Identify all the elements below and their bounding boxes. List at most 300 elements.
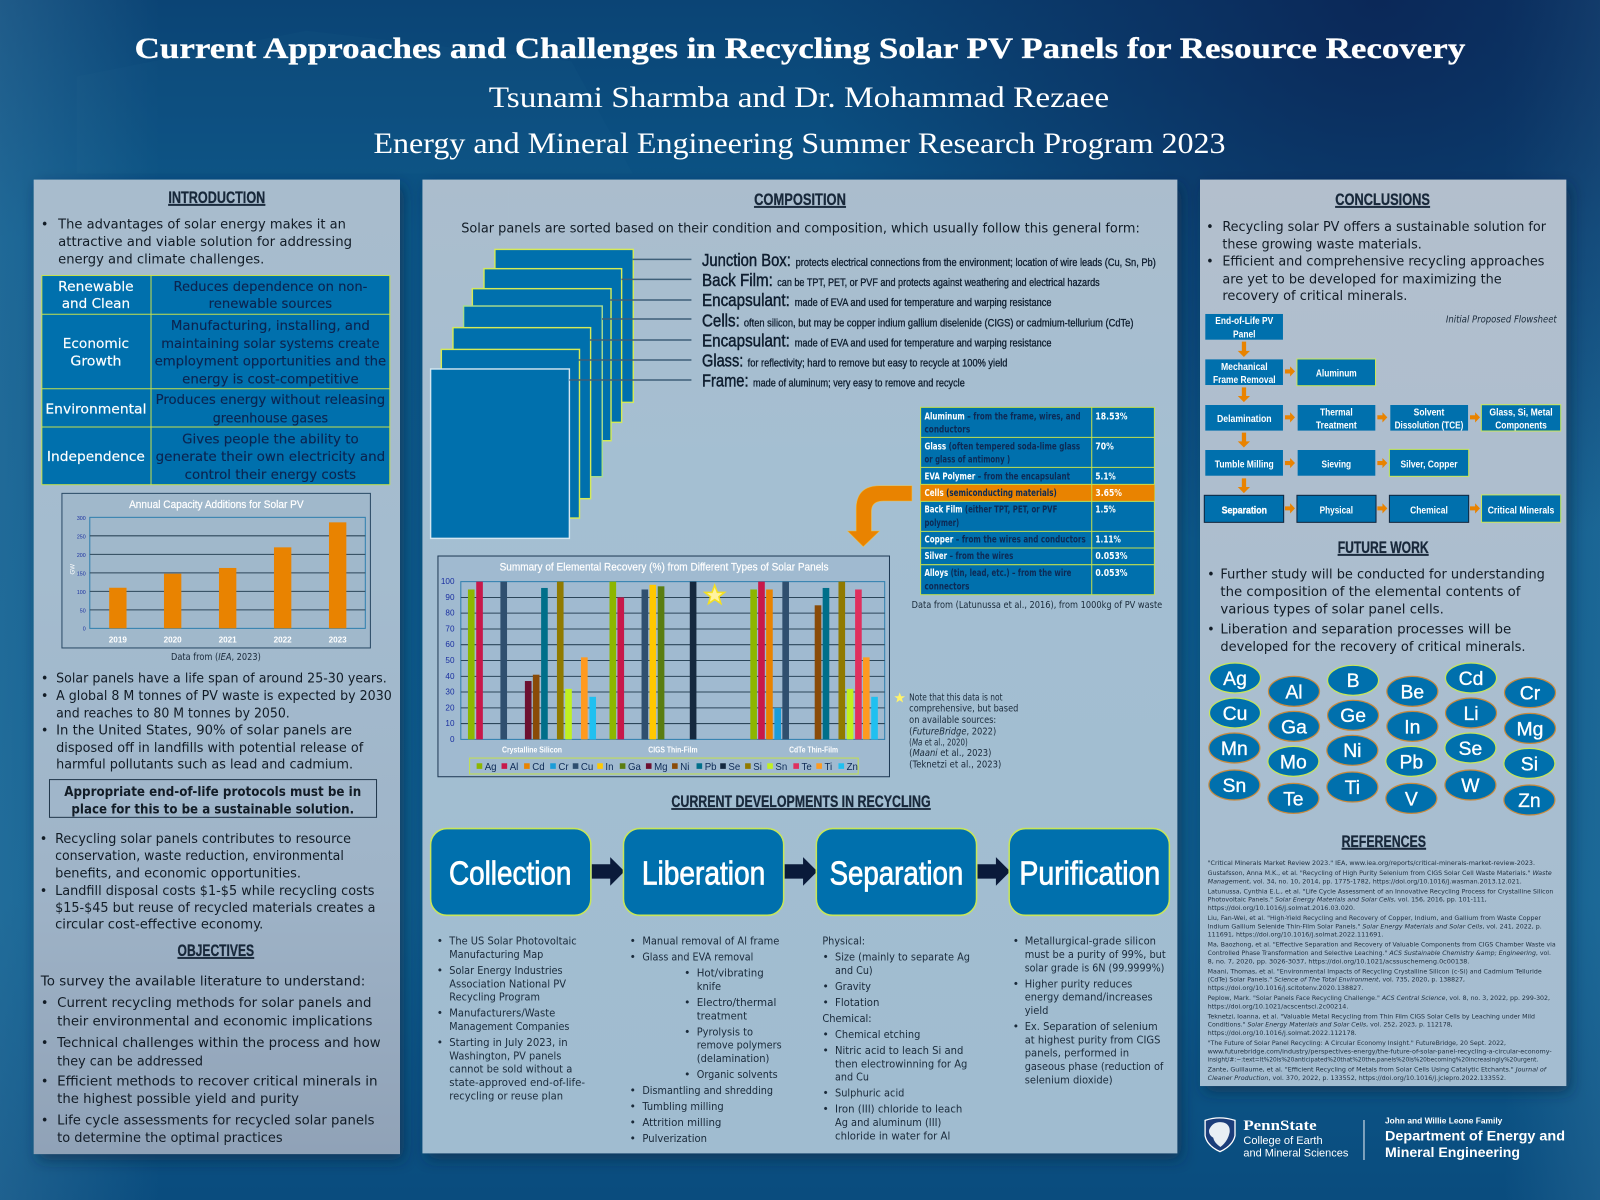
text block: collection details: • <box>437 1036 443 1049</box>
bar chart: elemental recovery: 50 <box>445 656 455 665</box>
text block: waste statistics: disposed off in landfills with potential release of <box>56 741 364 756</box>
arrow: separation to purification <box>978 857 1010 886</box>
text block: references: Latunussa, Cynthia E.L., et al. "Life Cycle Assessment of an Innovative Recycling Process for Crystalline Silicon <box>1208 887 1553 895</box>
text block: separation details: Flotation <box>835 996 879 1009</box>
text block: separation details: chloride in water for Al <box>835 1129 950 1142</box>
text block: recycling benefits <box>40 832 376 933</box>
text block: collection details: Washington, PV panels <box>449 1049 562 1062</box>
elements: critical mineral ovals: B <box>1347 670 1360 692</box>
table: PV panel material composition: Copper – from the wires and conductors <box>924 535 1086 546</box>
elements: critical mineral ovals: Ni <box>1343 740 1361 762</box>
caption: table source: Data from (Latunussa et al., 2016), from 1000kg of PV waste <box>912 600 1162 611</box>
text block: purification details: • <box>1013 977 1019 990</box>
text block: liberation details: • <box>630 1132 636 1145</box>
text block: future work: • <box>1207 568 1215 583</box>
bar chart: elemental recovery <box>438 556 889 777</box>
bar chart: annual capacity additions: 2019 <box>109 635 127 644</box>
table: PV panel material composition: conductors <box>924 425 971 436</box>
logo: Penn State College of Earth and Mineral Sciences: College of Earth <box>1243 1135 1323 1147</box>
table: PV panel material composition: connectors <box>924 581 970 592</box>
text block: collection details: • <box>437 964 443 977</box>
callout: end-of-life protocols: Appropriate end-of-life protocols must be in <box>64 785 361 800</box>
elements: critical mineral ovals <box>1209 663 1556 815</box>
note: data sources: (Ma et al., 2020) <box>909 738 968 749</box>
text block: objectives: Life cycle assessments for recycled solar panels <box>57 1113 375 1128</box>
stage: purification: Purification <box>1019 856 1160 893</box>
chart legend: In <box>605 762 614 773</box>
text block: separation details: Nitric acid to leach Si and <box>835 1044 963 1057</box>
text block: future work: various types of solar panel cells. <box>1220 602 1444 617</box>
table: benefits of solar energy: greenhouse gases <box>213 411 328 426</box>
text block: separation details: and Cu <box>835 1071 869 1084</box>
labels: panel layers: Glass: <box>702 351 743 371</box>
bar chart: elemental recovery: CIGS Thin-Film <box>648 746 698 755</box>
text block: purification details: • <box>1013 1020 1019 1033</box>
flowsheet: proposed recycling process: Glass, Si, Metal <box>1489 407 1553 418</box>
table: benefits of solar energy: control their energy costs <box>185 468 356 483</box>
text block: advantages: attractive and viable solution for addressing <box>58 235 352 250</box>
text block: recycling benefits: • <box>40 832 47 847</box>
bar chart: annual capacity additions: 0 <box>83 627 86 633</box>
text block: objectives: • <box>41 1113 48 1128</box>
chart legend: Se <box>728 762 740 773</box>
text block: objectives: • <box>41 996 48 1011</box>
bar chart: elemental recovery: 60 <box>445 640 455 649</box>
text block: future work: Liberation and separation processes will be <box>1220 623 1511 638</box>
labels: panel layers: made of EVA and used for temperature and warping resistance <box>795 338 1052 350</box>
heading: composition: COMPOSITION <box>754 191 846 209</box>
program name: Energy and Mineral Engineering Summer Research Program 2023 <box>373 128 1226 160</box>
text block: liberation details: treatment <box>697 1009 747 1022</box>
heading: conclusions: CONCLUSIONS <box>1335 191 1430 209</box>
text block: conclusions: recovery of critical minerals. <box>1222 289 1407 304</box>
text block: objectives: To survey the available literature to understand: <box>40 975 365 990</box>
labels: panel layers: Back Film: <box>702 270 773 290</box>
text block: waste statistics: • <box>41 672 48 687</box>
elements: critical mineral ovals: Ag <box>1223 668 1247 690</box>
elements: critical mineral ovals: Ga <box>1281 716 1307 738</box>
text block: recycling benefits: • <box>40 884 47 899</box>
stage: liberation: Liberation <box>642 856 765 893</box>
chart legend: Al <box>510 762 518 773</box>
text block: separation details: Iron (III) chloride to leach <box>835 1103 962 1116</box>
text block: liberation details <box>630 935 782 1145</box>
flowsheet: proposed recycling process: Delamination <box>1217 414 1272 425</box>
table: PV panel material composition: 0.053% <box>1095 551 1128 562</box>
text block: references: Teknetzi, Ioanna, et al. "Valuable Metal Recycling from Thin Film CIGS Solar Cells by Leaching under Mild <box>1207 1012 1535 1020</box>
text block: future work: Further study will be conducted for understanding <box>1220 568 1545 583</box>
text block: collection details: state-approved end-of-life- <box>449 1076 585 1089</box>
text block: objectives: to determine the optimal practices <box>57 1131 283 1146</box>
labels: panel layers: for reflectivity; hard to remove but easy to recycle at 100% yield <box>748 358 1008 370</box>
text block: purification details: Higher purity reduces <box>1025 977 1133 990</box>
text block: liberation details: Hot/vibrating <box>697 967 764 980</box>
table: PV panel material composition: 3.65% <box>1095 488 1122 499</box>
icon: star marker in chart <box>705 585 724 604</box>
chart legend: Pb <box>705 762 717 773</box>
text block: liberation details: Electro/thermal <box>697 996 776 1009</box>
authors: Tsunami Sharmba and Dr. Mohammad Rezaee <box>489 82 1109 114</box>
elements: critical mineral ovals: Be <box>1400 681 1424 703</box>
text block: liberation details: Pyrolysis to <box>697 1025 753 1038</box>
bar chart: annual capacity additions: GW <box>69 564 76 574</box>
text block: references: Indium Gallium Selenide Thin-Film Solar Panels." Solar Energy Materials and Solar Cells, vol. 241, 2022, p. <box>1208 922 1542 930</box>
table: PV panel material composition: 1.11% <box>1095 535 1121 546</box>
elements: critical mineral ovals: Mn <box>1221 738 1248 760</box>
text block: purification details: • <box>1013 935 1019 948</box>
labels: panel layers: often silicon, but may be copper indium gallium diselenide (CIGS) or cadmium-tellurium (CdTe) <box>744 318 1133 330</box>
text block: separation details: Size (mainly to separate Ag <box>835 951 970 964</box>
text block: recycling benefits: benefits, and economic opportunities. <box>55 867 301 882</box>
flowsheet: proposed recycling process: Dissolution (TCE) <box>1395 421 1463 432</box>
bar chart: elemental recovery: 80 <box>445 609 455 618</box>
labels: panel layers: can be TPT, PET, or PVF and protects against weathering and electrical hazards <box>777 277 1100 289</box>
text block: waste statistics <box>41 672 392 772</box>
table: benefits of solar energy: Reduces dependence on non- <box>173 280 367 295</box>
heading: introduction: INTRODUCTION <box>168 189 265 207</box>
text block: references: Ma, Baozhong, et al. "Effective Separation and Recovery of Valuable Components from CIGS Chamber Waste via <box>1208 941 1556 949</box>
chart legend: Si <box>753 762 762 773</box>
elements: critical mineral ovals: Ge <box>1340 705 1366 727</box>
elements: critical mineral ovals: Se <box>1459 738 1482 760</box>
table: PV panel material composition: 70% <box>1095 441 1114 452</box>
text block: references: Zante, Guillaume, et al. "Efficient Recycling of Metals from Solar Cells Using Catalytic Etchants." Journal of <box>1208 1066 1548 1074</box>
text block: references: Gustafsson, Anna M.K., et al. "Recycling of High Purity Selenium from CIGS Solar Cell Waste Materials." Waste <box>1208 869 1552 877</box>
elements: critical mineral ovals: V <box>1405 788 1418 810</box>
labels: panel layers: protects electrical connections from the environment; location of wire leads (Cu, Sn, Pb) <box>796 257 1156 269</box>
logo: Penn State College of Earth and Mineral Sciences: and Mineral Sciences <box>1243 1148 1349 1160</box>
table: PV panel material composition: Cells (semiconducting materials) <box>924 488 1057 499</box>
text block: collection details: Recycling Program <box>449 991 540 1004</box>
heading: references: REFERENCES <box>1342 833 1426 851</box>
text block: advantages: • <box>41 218 48 233</box>
flowsheet: proposed recycling process: Separation <box>1222 505 1267 516</box>
elements: critical mineral ovals: Te <box>1283 788 1304 810</box>
text block: separation details: and Cu) <box>835 964 873 977</box>
bar chart: annual capacity additions: Annual Capacity Additions for Solar PV <box>129 499 304 511</box>
bar chart: elemental recovery: 20 <box>445 703 455 712</box>
flowsheet: proposed recycling process: Thermal <box>1320 407 1353 418</box>
caption: flowsheet: Initial Proposed Flowsheet <box>1446 315 1558 326</box>
bar chart: elemental recovery: 0 <box>450 735 455 744</box>
caption: chart source: Data from (IEA, 2023) <box>171 652 261 663</box>
stage: separation: Separation <box>830 856 963 893</box>
text block: liberation details: • <box>630 935 636 948</box>
text block: objectives: • <box>41 1036 48 1051</box>
title: Current Approaches and Challenges in Recycling Solar PV Panels for Resource Recovery <box>135 33 1466 65</box>
note: data sources: comprehensive, but based <box>909 704 1018 715</box>
text block: separation details: Physical: <box>822 935 865 948</box>
text block: liberation details: Tumbling milling <box>641 1100 724 1113</box>
heading: future work: FUTURE WORK <box>1338 539 1429 557</box>
table: benefits of solar energy: maintaining solar systems create <box>161 337 380 352</box>
table: benefits of solar energy <box>42 276 390 485</box>
text block: conclusions: are yet to be developed for maximizing the <box>1222 272 1502 287</box>
text block: references: "The Future of Solar Panel Recycling: A Circular Economy Insight." FutureBridge, 20 Sept. 2022, <box>1208 1039 1506 1047</box>
text block: separation details <box>822 935 970 1142</box>
text block: liberation details: • <box>630 1116 636 1129</box>
text block: purification details: Metallurgical-grade silicon <box>1025 935 1156 948</box>
text block: advantages: The advantages of solar energy makes it an <box>57 218 346 233</box>
text block: separation details: • <box>822 1028 829 1041</box>
note: data sources: (FutureBridge, 2022) <box>909 726 996 737</box>
flowsheet: proposed recycling process: Tumble Milling <box>1215 459 1274 470</box>
flowsheet: proposed recycling process: End-of-Life PV <box>1215 316 1274 327</box>
table: PV panel material composition: 0.053% <box>1095 568 1128 579</box>
chart legend: Sn <box>775 762 787 773</box>
flowsheet: proposed recycling process: Mechanical <box>1221 362 1268 373</box>
text block: separation details: Chemical etching <box>835 1028 920 1041</box>
labels: panel layers: Junction Box: <box>702 250 791 270</box>
text block: future work <box>1207 568 1545 655</box>
logo: Penn State College of Earth and Mineral Sciences: John and Willie Leone Family <box>1385 1115 1503 1125</box>
elements: critical mineral ovals: Mo <box>1280 751 1307 773</box>
text block: separation details: Sulphuric acid <box>835 1087 904 1100</box>
chart legend: Zn <box>847 762 858 773</box>
flowsheet: proposed recycling process: Components <box>1495 421 1547 432</box>
table: benefits of solar energy: generate their own electricity and <box>156 450 385 465</box>
note: data sources: (Teknetzi et al., 2023) <box>909 759 1001 770</box>
bar chart: annual capacity additions: 2021 <box>219 635 237 644</box>
text block: recycling benefits: Recycling solar panels contributes to resource <box>55 832 351 847</box>
text block: purification details: must be a purity of 99%, but <box>1025 948 1166 961</box>
table: benefits of solar energy: employment opportunities and the <box>155 354 386 369</box>
text block: waste statistics: In the United States, 90% of solar panels are <box>56 724 352 739</box>
text block: references: https://doi.org/10.1016/j.solmat.2016.03.020. <box>1208 904 1355 912</box>
table: benefits of solar energy: Independence <box>47 450 145 465</box>
text block: collection details: Solar Energy Industries <box>449 964 563 977</box>
table: benefits of solar energy: energy is cost-competitive <box>182 373 359 388</box>
text block: references: Photovoltaic Panels." Solar Energy Materials and Solar Cells, vol. 156, 2016, pp. 101-111, <box>1208 896 1487 904</box>
table: PV panel material composition: 18.53% <box>1095 411 1128 422</box>
bar chart: annual capacity additions: 150 <box>77 571 86 577</box>
elements: critical mineral ovals: Zn <box>1518 790 1541 812</box>
flowsheet: proposed recycling process: Aluminum <box>1316 368 1357 379</box>
text block: references: Cleaner Production, vol. 370, 2022, p. 133552, https://doi.org/10.1016/j.jclepro.2022.133552. <box>1208 1074 1506 1082</box>
elements: critical mineral ovals: In <box>1404 716 1420 738</box>
bar chart: annual capacity additions: 100 <box>77 590 86 596</box>
text block: advantages <box>41 218 352 267</box>
text block: references: https://doi.org/10.1016/j.scitotenv.2020.138827. <box>1208 984 1363 992</box>
note: data sources: (Maani et al., 2023) <box>909 748 991 759</box>
table: PV panel material composition: polymer) <box>924 518 959 529</box>
text block: collection details: Management Companies <box>449 1020 570 1033</box>
text block: references: Management, vol. 34, no. 10, 2014, pp. 1775-1782, https://doi.org/10.1016/j.wasman.2013.12.021. <box>1208 877 1522 885</box>
bar chart: elemental recovery: 10 <box>445 719 455 728</box>
flowsheet: proposed recycling process: Silver, Copper <box>1400 459 1458 470</box>
text block: references: Controlled Phase Transformation and Selective Leaching." ACS Sustainable Chemistry &amp; Engineering, vol. <box>1208 949 1551 957</box>
elements: critical mineral ovals: Cd <box>1459 668 1483 690</box>
text block: references: 8, no. 7, 2020, pp. 3026-3037, https://doi.org/10.1021/acssuschemeng.0c00138. <box>1208 957 1469 965</box>
note: data sources <box>894 692 1018 770</box>
table: PV panel material composition: 1.5% <box>1095 505 1116 516</box>
bar chart: elemental recovery: 100 <box>441 577 455 586</box>
bar chart: annual capacity additions <box>62 493 370 648</box>
text block: collection details <box>437 935 585 1102</box>
logo: Penn State College of Earth and Mineral Sciences: Department of Energy and <box>1385 1128 1565 1144</box>
chart legend: Cu <box>581 762 593 773</box>
text block: future work: the composition of the elemental contents of <box>1220 585 1521 600</box>
diagram: exploded solar panel layers <box>431 249 691 538</box>
text block: separation details: then electrowinning for Ag <box>835 1057 967 1070</box>
text block: collection details: • <box>437 1007 443 1020</box>
stage: collection: Collection <box>449 856 571 893</box>
table: benefits of solar energy: Produces energy without releasing <box>156 393 385 408</box>
elements: critical mineral ovals: Li <box>1463 703 1479 725</box>
elements: critical mineral ovals: Sn <box>1223 775 1246 797</box>
chart legend: Ag <box>485 762 497 773</box>
panel: introduction and objectives <box>34 180 400 1154</box>
note: data sources: Note that this data is not <box>909 693 1003 704</box>
text block: recycling benefits: circular cost-effective economy. <box>55 918 263 933</box>
table: benefits of solar energy: Renewable <box>58 280 134 295</box>
chart legend: Ni <box>680 762 689 773</box>
text block: waste statistics: A global 8 M tonnes of PV waste is expected by 2030 <box>56 689 392 704</box>
table: PV panel material composition: Back Film (either TPT, PET, or PVF <box>924 505 1057 516</box>
text block: objectives: • <box>41 1075 48 1090</box>
text block: waste statistics: and reaches to 80 M tonnes by 2050. <box>56 706 290 721</box>
stage: purification <box>1009 829 1169 915</box>
text block: recycling benefits: Landfill disposal costs $1-$5 while recycling costs <box>55 884 375 899</box>
text block: collection details: • <box>437 935 443 948</box>
table: PV panel material composition: Aluminum – from the frame, wires, and <box>924 411 1081 422</box>
chart legend: Cd <box>532 762 545 773</box>
text block: recycling benefits: conservation, waste reduction, environmental <box>55 849 344 864</box>
text block: references: www.futurebridge.com/industry/perspectives-energy/the-future-of-solar-panel-recycling-a-circular-economy- <box>1208 1047 1552 1055</box>
text block: liberation details: (delamination) <box>697 1052 769 1065</box>
flowsheet: proposed recycling process: Treatment <box>1316 421 1357 432</box>
bar chart: annual capacity additions: 2022 <box>274 635 292 644</box>
text block: separation details: • <box>822 980 829 993</box>
text block: objectives: their environmental and economic implications <box>57 1015 373 1030</box>
table: PV panel material composition: EVA Polymer – from the encapsulant <box>924 471 1070 482</box>
heading: objectives: OBJECTIVES <box>178 942 254 960</box>
table: benefits of solar energy: Environmental <box>45 402 146 417</box>
text block: separation details: • <box>822 1103 829 1116</box>
text block: liberation details: • <box>684 996 690 1009</box>
elements: critical mineral ovals: Cr <box>1520 683 1541 705</box>
elements: critical mineral ovals: Al <box>1285 681 1303 703</box>
bar chart: elemental recovery: 70 <box>445 625 455 634</box>
text block: references: insight/#:~:text=It%20is%20anticipated%20that%20the,panels%20is%20becoming%20increasingly%20urgent. <box>1208 1056 1538 1064</box>
chart legend: Mg <box>654 762 668 773</box>
labels: panel layers: Cells: <box>702 311 740 331</box>
text block: references: (CdTe) Solar Panels." Science of The Total Environment, vol. 735, 2020, p. 138827, <box>1208 976 1465 984</box>
note: data sources: on available sources: <box>909 715 996 726</box>
text block: separation details: • <box>822 1044 829 1057</box>
text block: waste statistics: Solar panels have a life span of around 25-30 years. <box>56 672 387 687</box>
text block: conclusions: • <box>1206 255 1214 270</box>
elements: critical mineral ovals: Si <box>1521 753 1538 775</box>
text block: separation details: Gravity <box>835 980 871 993</box>
bar chart: elemental recovery: 40 <box>445 672 455 681</box>
text block: liberation details: • <box>684 967 690 980</box>
process flow: collection to purification <box>431 829 1169 915</box>
chart legend <box>470 758 858 774</box>
text block: waste statistics: • <box>41 724 48 739</box>
text block: purification details: solar grade is 6N (99.9999%) <box>1025 961 1164 974</box>
elements: critical mineral ovals: Mg <box>1517 718 1543 740</box>
text block: collection details: Association National PV <box>449 977 567 990</box>
text block: liberation details: • <box>630 951 636 964</box>
text block: purification details: at highest purity from CIGS <box>1025 1033 1161 1046</box>
text block: separation details: Chemical: <box>822 1012 872 1025</box>
table: PV panel material composition: or glass of antimony ) <box>924 455 1010 466</box>
bar chart: annual capacity additions: 200 <box>77 553 86 559</box>
table: PV panel material composition: 5.1% <box>1095 471 1116 482</box>
arrow: liberation to separation <box>785 857 817 886</box>
text block: purification details: gaseous phase (reduction of <box>1025 1060 1164 1073</box>
text block: purification details: yield <box>1025 1004 1048 1017</box>
logo: Penn State College of Earth and Mineral Sciences: PennState <box>1243 1118 1317 1134</box>
table: PV panel material composition: Glass (often tempered soda-lime glass <box>924 441 1081 452</box>
flowsheet: proposed recycling process: Physical <box>1320 505 1353 516</box>
text block: liberation details: • <box>630 1084 636 1097</box>
text block: conclusions: • <box>1206 220 1214 235</box>
text block: liberation details: remove polymers <box>697 1039 782 1052</box>
arrow: cells to elemental recovery chart <box>848 486 912 547</box>
text block: conclusions: Efficient and comprehensive recycling approaches <box>1222 255 1545 270</box>
text block: liberation details: Dismantling and shredding <box>642 1084 773 1097</box>
text block: liberation details: • <box>630 1100 636 1113</box>
table: PV panel material composition: Silver – from the wires <box>924 551 1014 562</box>
text block: advantages: energy and climate challenges. <box>58 252 264 267</box>
text block: purification details <box>1013 935 1166 1086</box>
stage: collection <box>431 829 591 915</box>
chart legend: Te <box>802 762 812 773</box>
text block: liberation details: • <box>684 1025 690 1038</box>
text block: conclusions <box>1206 220 1547 304</box>
text block: collection details: The US Solar Photovoltaic <box>448 935 577 948</box>
text block: recycling benefits: $15-$45 but reuse of recycled materials creates a <box>55 901 376 916</box>
table: benefits of solar energy: Gives people the ability to <box>182 432 359 447</box>
text block: objectives: Current recycling methods for solar panels and <box>57 996 371 1011</box>
bar chart: annual capacity additions: 50 <box>80 608 86 614</box>
flowsheet: proposed recycling process: Panel <box>1233 329 1256 340</box>
icon: nittany lion shield <box>1205 1118 1235 1152</box>
text block: purification details: panels, performed in <box>1025 1047 1129 1060</box>
text block: references <box>1207 859 1556 1082</box>
text: composition intro: Solar panels are sorted based on their condition and composition, which usually follow this general form: <box>461 222 1140 237</box>
text block: liberation details: • <box>684 1068 690 1081</box>
text block: liberation details: Attrition milling <box>642 1116 721 1129</box>
labels: panel layers: Frame: <box>702 371 749 391</box>
text block: liberation details: Glass and EVA removal <box>642 951 753 964</box>
bar chart: elemental recovery: 90 <box>445 593 455 602</box>
text block: liberation details: knife <box>697 980 721 993</box>
flowsheet: proposed recycling process: Critical Minerals <box>1488 505 1555 516</box>
bar chart: annual capacity additions: 250 <box>77 534 86 540</box>
heading: current developments: CURRENT DEVELOPMENTS IN RECYCLING <box>671 793 931 811</box>
flowsheet: proposed recycling process <box>1204 314 1561 522</box>
text block: separation details: • <box>822 951 829 964</box>
text block: objectives: Efficient methods to recover critical minerals in <box>57 1075 378 1090</box>
text block: objectives: they can be addressed <box>57 1054 203 1069</box>
stage: separation <box>816 829 977 915</box>
bar chart: annual capacity additions: 2020 <box>164 635 182 644</box>
bar chart: annual capacity additions: 2023 <box>329 635 347 644</box>
flowsheet: proposed recycling process: Chemical <box>1410 505 1448 516</box>
elements: critical mineral ovals: W <box>1461 775 1480 797</box>
text block: conclusions: these growing waste materials. <box>1222 237 1422 252</box>
labels: panel layers: made of EVA and used for temperature and warping resistance <box>795 297 1052 309</box>
text block: objectives <box>40 975 381 1146</box>
text block: future work: developed for the recovery of critical minerals. <box>1220 640 1526 655</box>
table: PV panel material composition: Alloys (tin, lead, etc.) – from the wire <box>924 568 1071 579</box>
text block: references: Peplow, Mark. "Solar Panels Face Recycling Challenge." ACS Central Science, vol. 8, no. 3, 2022, pp. 299-302, <box>1208 994 1550 1002</box>
text block: purification details: selenium dioxide) <box>1025 1073 1113 1086</box>
text block: objectives: Technical challenges within the process and how <box>56 1036 381 1051</box>
